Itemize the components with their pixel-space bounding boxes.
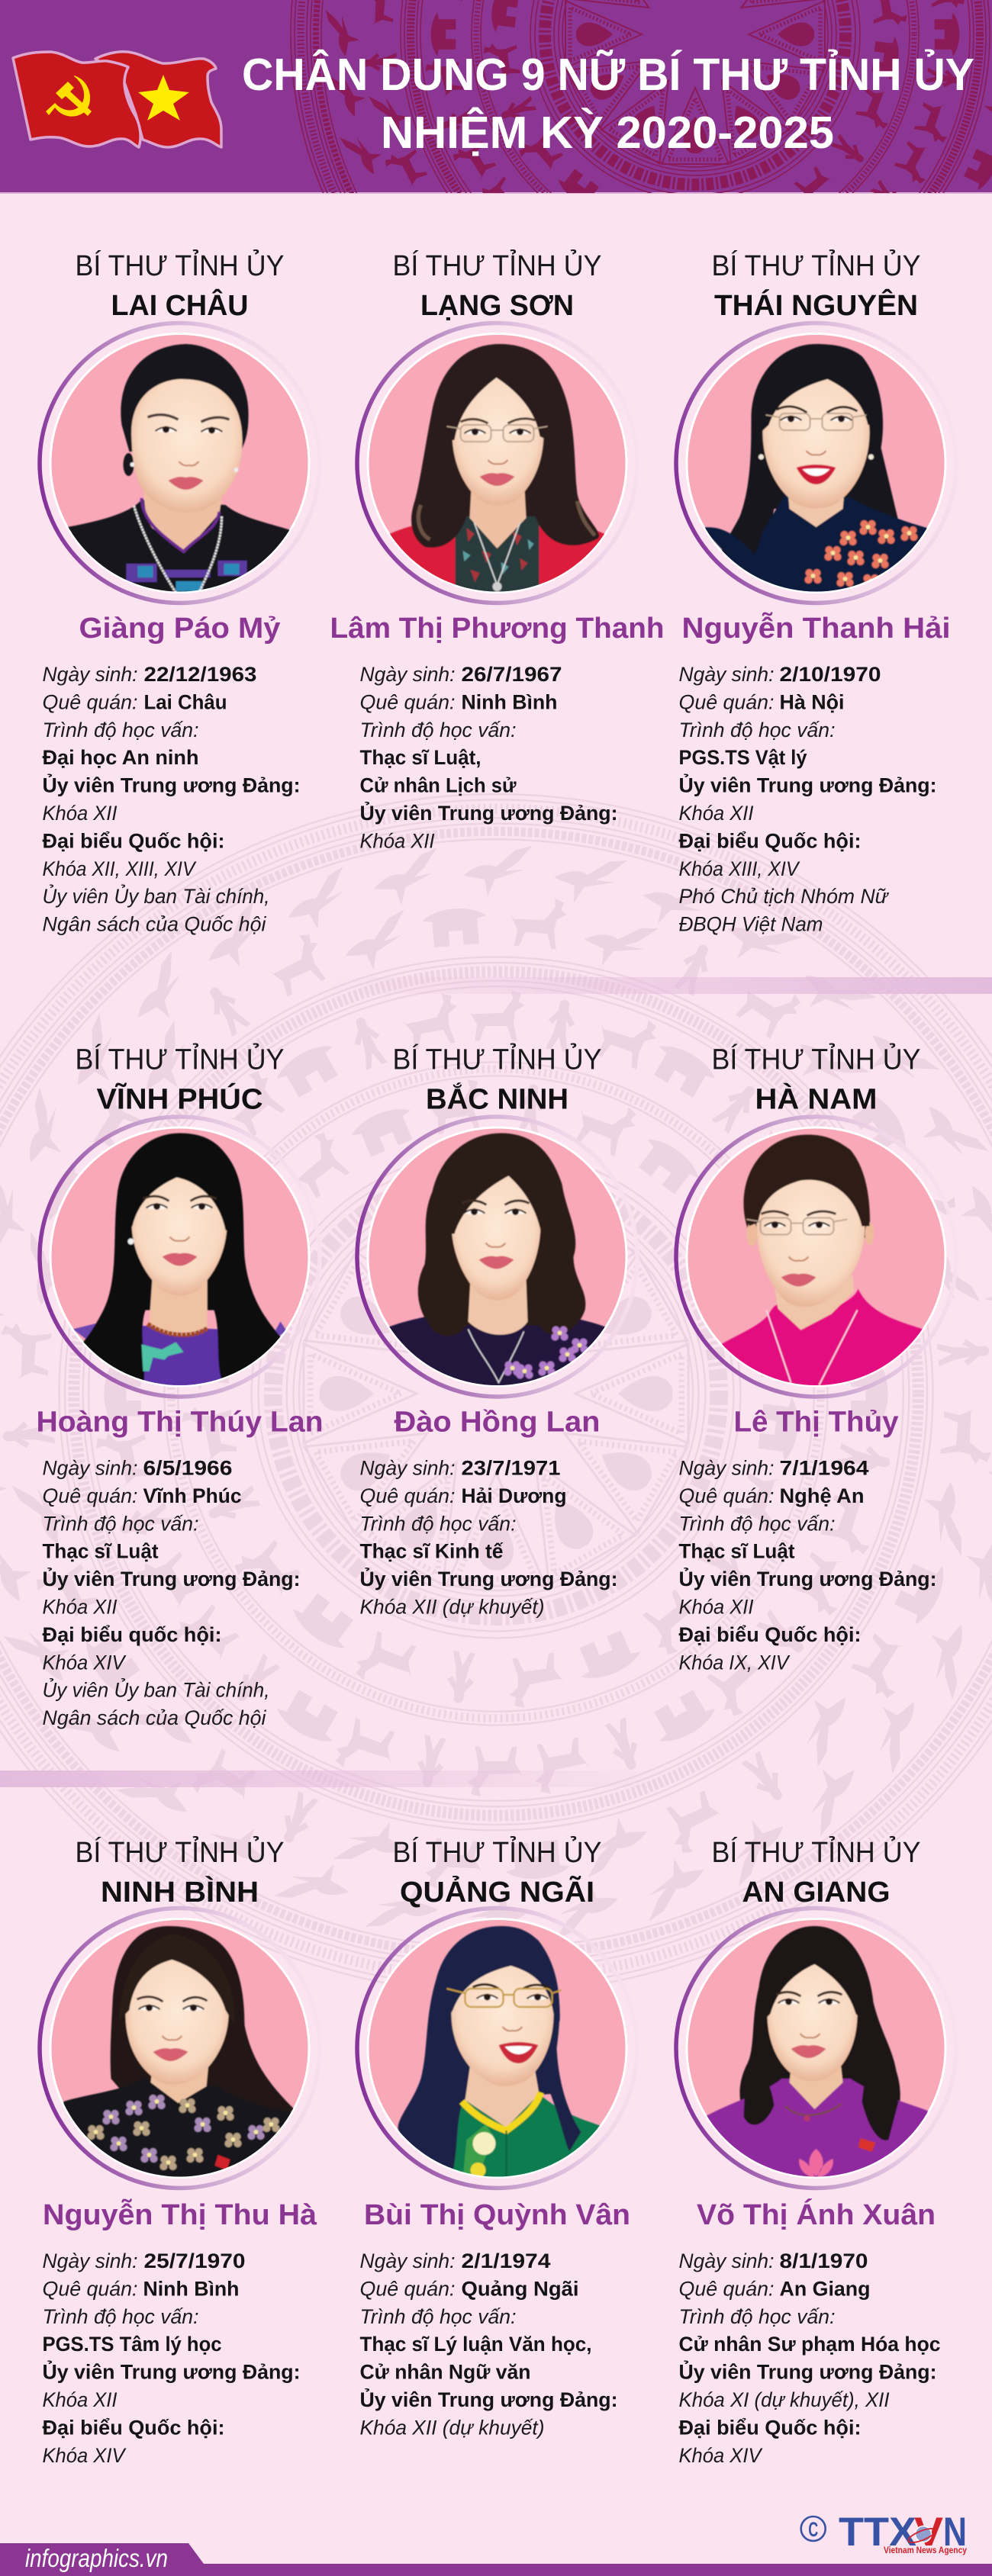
heading — [392, 1835, 601, 1909]
name: Nguyễn Thanh Hải — [682, 611, 950, 645]
bio: Ủy viên Ủy ban Tài chính, — [43, 1677, 270, 1702]
bio: Ủy viên Trung ương Đảng: — [679, 773, 937, 797]
bio: Ủy viên Ủy ban Tài chính, — [43, 883, 270, 908]
bio: Trình độ học vấn: — [360, 2305, 516, 2328]
bio: PGS.TS Tâm lý học — [43, 2333, 221, 2356]
title — [242, 49, 974, 158]
bio: Hải Dương — [461, 1484, 566, 1507]
divider band lower — [0, 1770, 672, 1787]
bio — [360, 663, 618, 852]
bio: Hà Nội — [780, 690, 844, 713]
bio: Khóa XIV — [43, 1651, 127, 1674]
bio: Ngày sinh: — [43, 2250, 137, 2272]
footer site name: infographics.vn — [25, 2544, 168, 2572]
bio: Khóa XII — [679, 1596, 754, 1619]
portrait: Lâm Thị Phương Thanh — [357, 323, 637, 603]
bio: Quê quán: — [360, 690, 455, 713]
bio: Ninh Bình — [461, 690, 557, 713]
heading: LAI CHÂU — [111, 288, 249, 322]
heading: BÍ THƯ TỈNH ỦY — [711, 249, 920, 282]
heading: BÍ THƯ TỈNH ỦY — [392, 249, 601, 282]
bio: Đại biểu Quốc hội: — [679, 829, 861, 852]
bio: Quê quán: — [360, 2277, 455, 2300]
bio: Thạc sĩ Luật, — [360, 746, 481, 769]
portrait: Bùi Thị Quỳnh Vân — [357, 1909, 637, 2188]
bio — [360, 1457, 618, 1619]
portrait: Đào Hồng Lan — [357, 1117, 637, 1397]
panel: Bắc Ninh — [357, 1042, 637, 1619]
bio: 25/7/1970 — [143, 2250, 246, 2272]
panel: An Giang — [676, 1835, 956, 2467]
title: CHÂN DUNG 9 NỮ BÍ THƯ TỈNH ỦY — [242, 49, 974, 100]
bio: Trình độ học vấn: — [43, 1512, 198, 1535]
portrait: Lê Thị Thủy — [676, 1117, 956, 1397]
bio: Trình độ học vấn: — [43, 2305, 198, 2328]
bio: Đại biểu Quốc hội: — [43, 829, 224, 852]
bio: Khóa XII — [360, 829, 435, 852]
footer bar — [0, 2543, 992, 2576]
bio: Ngày sinh: — [360, 1457, 455, 1480]
bio: Đại học An ninh — [43, 746, 198, 769]
heading — [75, 249, 284, 322]
bio: Quảng Ngãi — [461, 2277, 578, 2300]
bio: Ủy viên Trung ương Đảng: — [360, 1566, 618, 1590]
heading: HÀ NAM — [755, 1082, 878, 1115]
heading: THÁI NGUYÊN — [714, 288, 918, 322]
bio: Khóa XII — [43, 802, 118, 825]
panel: Hà Nam — [676, 1042, 956, 1674]
bio: Khóa XII — [679, 802, 754, 825]
bio: 26/7/1967 — [461, 663, 562, 686]
bio: Thạc sĩ Kinh tế — [360, 1540, 504, 1563]
portrait: Nguyễn Thanh Hải — [676, 323, 956, 603]
icon: copyright symbol — [801, 2517, 826, 2541]
name: Nguyễn Thị Thu Hà — [43, 2198, 317, 2231]
bio: Trình độ học vấn: — [679, 2305, 835, 2328]
logo: TTXVN copyright: Vietnam News Agency — [884, 2545, 967, 2555]
heading — [392, 1042, 601, 1115]
bio: Trình độ học vấn: — [360, 1512, 516, 1535]
panel: Thái Nguyên — [676, 249, 956, 936]
heading: LẠNG SƠN — [420, 290, 574, 322]
bio: Khóa XI (dự khuyết), XII — [679, 2388, 890, 2411]
bio: Khóa XII (dự khuyết) — [360, 2416, 545, 2439]
bio: Trình độ học vấn: — [679, 719, 835, 741]
bio: Ủy viên Trung ương Đảng: — [679, 2359, 937, 2384]
portrait: Nguyễn Thị Thu Hà — [40, 1909, 320, 2188]
bio — [679, 2250, 940, 2467]
bio: Phó Chủ tịch Nhóm Nữ — [679, 885, 889, 908]
bio: Thạc sĩ Lý luận Văn học, — [360, 2333, 592, 2356]
bio: Ninh Bình — [143, 2277, 240, 2300]
heading: BÍ THƯ TỈNH ỦY — [75, 1042, 284, 1076]
heading: BẮC NINH — [426, 1082, 568, 1115]
name: Lê Thị Thủy — [734, 1407, 899, 1439]
bio: Quê quán: — [43, 2277, 137, 2300]
bio: Quê quán: — [679, 690, 774, 713]
bio: Khóa XII — [43, 1596, 118, 1619]
bio: Cử nhân Ngữ văn — [360, 2361, 531, 2384]
heading: AN GIANG — [742, 1877, 890, 1909]
bio: Quê quán: — [43, 1484, 137, 1507]
name: Giàng Páo Mỷ — [79, 613, 281, 645]
bio: Ủy viên Trung ương Đảng: — [43, 1566, 301, 1590]
bio — [43, 663, 301, 936]
bio: Khóa XIII, XIV — [679, 857, 800, 880]
bio: Ngày sinh: — [679, 663, 774, 686]
bio: Ngày sinh: — [360, 2250, 455, 2272]
name: Hoàng Thị Thúy Lan — [37, 1407, 324, 1439]
bio: Ủy viên Trung ương Đảng: — [43, 2359, 301, 2384]
portrait: Võ Thị Ánh Xuân — [676, 1909, 956, 2188]
bio: Trình độ học vấn: — [360, 719, 516, 741]
panel: Vĩnh Phúc — [37, 1042, 324, 1729]
bio — [679, 1457, 937, 1674]
heading: BÍ THƯ TỈNH ỦY — [711, 1042, 920, 1076]
bio: Ngày sinh: — [43, 1457, 137, 1480]
bio: Ngân sách của Quốc hội — [43, 1706, 266, 1729]
bio: Ngân sách của Quốc hội — [43, 913, 266, 936]
bio: Ngày sinh: — [679, 2250, 774, 2272]
heading: NINH BÌNH — [101, 1875, 259, 1909]
bio: Ủy viên Trung ương Đảng: — [360, 800, 618, 825]
header drum pattern — [290, 0, 992, 193]
bio: 23/7/1971 — [461, 1457, 560, 1480]
bio: 7/1/1964 — [780, 1457, 868, 1480]
icon: globe — [907, 2526, 937, 2545]
bio: An Giang — [780, 2277, 870, 2300]
bio: Trình độ học vấn: — [679, 1512, 835, 1535]
bio: Thạc sĩ Luật — [679, 1540, 795, 1563]
bio: 6/5/1966 — [143, 1457, 232, 1480]
heading: VĨNH PHÚC — [96, 1082, 262, 1115]
name: Đào Hồng Lan — [394, 1407, 600, 1439]
header banner — [0, 0, 992, 194]
logo: TTXVN copyright: N — [943, 2510, 967, 2555]
bio: Đại biểu Quốc hội: — [679, 2416, 861, 2439]
bio: Cử nhân Lịch sử — [360, 774, 517, 797]
logo: TTXVN copyright: V — [914, 2510, 943, 2555]
heading: BÍ THƯ TỈNH ỦY — [392, 1835, 601, 1869]
bio: Quê quán: — [360, 1484, 455, 1507]
heading — [75, 1835, 284, 1909]
bio: Ngày sinh: — [360, 663, 455, 686]
bio: Khóa XIV — [43, 2444, 127, 2467]
bio: Đại biểu Quốc hội: — [43, 2416, 224, 2439]
bio: Nghệ An — [780, 1484, 864, 1507]
heading — [75, 1042, 284, 1115]
name: Võ Thị Ánh Xuân — [697, 2198, 936, 2231]
watermark: bronze drum pattern — [0, 736, 992, 2051]
bio — [43, 2250, 301, 2467]
bio — [360, 2250, 618, 2439]
bio: 8/1/1970 — [780, 2250, 868, 2272]
bio: Quê quán: — [679, 1484, 774, 1507]
panel: Lạng Sơn — [330, 249, 664, 852]
name: Bùi Thị Quỳnh Vân — [364, 2199, 630, 2231]
icon: copyright symbol: C — [808, 2518, 818, 2541]
icon: party and national flags — [13, 52, 221, 147]
heading: BÍ THƯ TỈNH ỦY — [75, 249, 284, 282]
bio: Ủy viên Trung ương Đảng: — [43, 773, 301, 797]
bio: Vĩnh Phúc — [143, 1484, 241, 1507]
bio: ĐBQH Việt Nam — [679, 913, 823, 936]
bio: Ủy viên Trung ương Đảng: — [679, 1566, 937, 1590]
heading: QUẢNG NGÃI — [400, 1875, 594, 1909]
heading — [711, 1042, 920, 1115]
heading — [711, 1835, 920, 1909]
bio: Ngày sinh: — [679, 1457, 774, 1480]
logo: TTXVN copyright — [801, 2510, 967, 2555]
bio: Khóa XII (dự khuyết) — [360, 1596, 545, 1619]
bio — [43, 1457, 301, 1729]
bio: PGS.TS Vật lý — [679, 746, 807, 769]
bio: Thạc sĩ Luật — [43, 1540, 159, 1563]
bio: Ngày sinh: — [43, 663, 137, 686]
bio — [679, 663, 937, 936]
portrait: Hoàng Thị Thúy Lan — [40, 1117, 320, 1397]
bio: Ủy viên Trung ương Đảng: — [360, 2387, 618, 2411]
bio: Trình độ học vấn: — [43, 719, 198, 741]
bio: Quê quán: — [43, 690, 137, 713]
heading — [392, 249, 601, 322]
name: Lâm Thị Phương Thanh — [330, 613, 664, 645]
divider band upper — [328, 977, 992, 994]
heading: BÍ THƯ TỈNH ỦY — [392, 1042, 601, 1076]
bio: Khóa XIV — [679, 2444, 763, 2467]
bio: 22/12/1963 — [143, 663, 256, 686]
bio: Cử nhân Sư phạm Hóa học — [679, 2333, 940, 2356]
bio: Quê quán: — [679, 2277, 774, 2300]
bio: Khóa IX, XIV — [679, 1651, 791, 1674]
portrait: Giàng Páo Mỷ — [40, 323, 320, 603]
panel: Quảng Ngãi — [357, 1835, 637, 2439]
panel: Ninh Bình — [40, 1835, 320, 2467]
bio: Đại biểu Quốc hội: — [679, 1623, 861, 1646]
heading: BÍ THƯ TỈNH ỦY — [75, 1835, 284, 1869]
icon: star — [138, 75, 189, 121]
bio: Khóa XII — [43, 2388, 118, 2411]
heading: BÍ THƯ TỈNH ỦY — [711, 1835, 920, 1869]
bio: Khóa XII, XIII, XIV — [43, 857, 197, 880]
bio: 2/1/1974 — [461, 2250, 551, 2272]
bio: Lai Châu — [143, 690, 227, 713]
panel: Lai Châu — [40, 249, 320, 936]
bio: 2/10/1970 — [780, 663, 881, 686]
logo: TTXVN copyright: TTX — [839, 2510, 916, 2555]
bio: Đại biểu quốc hội: — [43, 1623, 221, 1646]
heading — [711, 249, 920, 322]
title: NHIỆM KỲ 2020-2025 — [381, 107, 834, 158]
icon: hammer and sickle — [46, 76, 92, 117]
